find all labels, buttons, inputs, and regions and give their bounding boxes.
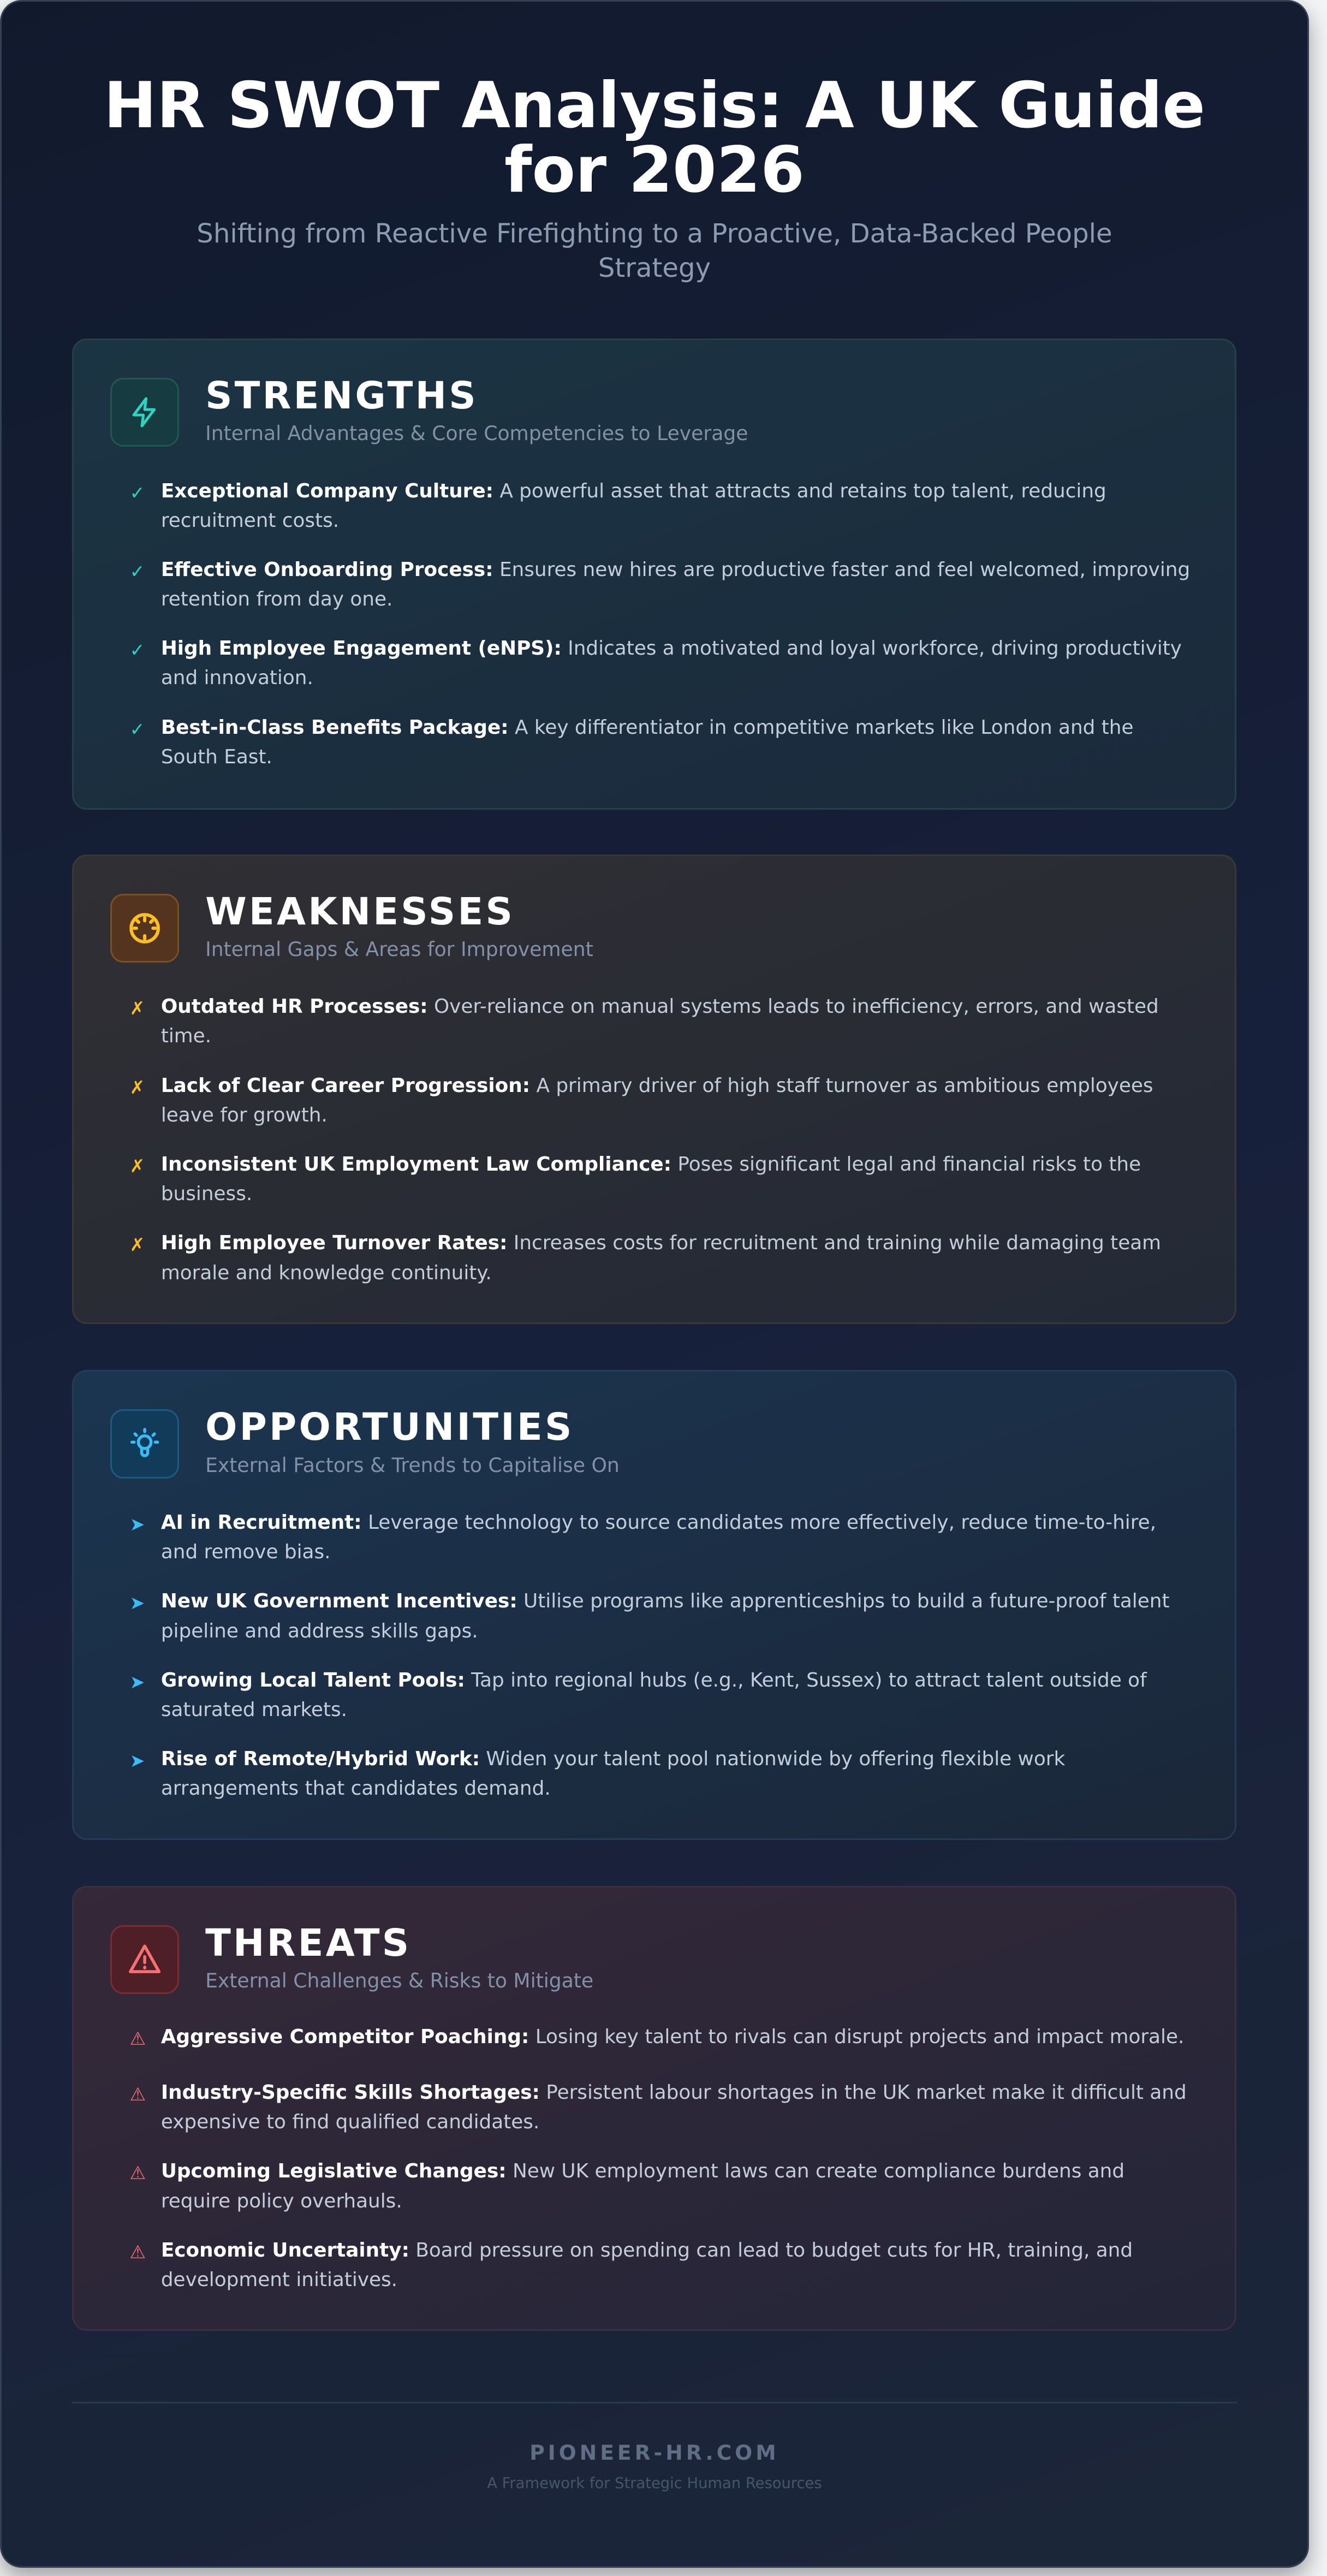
item 1: time. xyxy=(161,1025,211,1047)
item 4 xyxy=(130,2239,1133,2291)
icon: gauge xyxy=(110,894,179,963)
panel: threats: ⚠ xyxy=(130,2084,146,2105)
item 4: High Employee Turnover Rates: Increases costs for recruitment and training while damaging team xyxy=(161,1232,1161,1254)
item 4: Rise of Remote/Hybrid Work: Widen your talent pool nationwide by offering flexible work xyxy=(161,1748,1065,1770)
icon: warning xyxy=(110,1925,179,1994)
subheading: External Challenges & Risks to Mitigate xyxy=(205,1969,593,1992)
item 3: Upcoming Legislative Changes: New UK employment laws can create compliance burdens and xyxy=(161,2160,1124,2182)
panel: threats: ⚠ xyxy=(130,2162,146,2183)
item 3: saturated markets. xyxy=(161,1699,347,1721)
heading: STRENGTHS xyxy=(205,374,478,418)
subtitle: Shifting from Reactive Firefighting to a Proactive, Data-Backed People xyxy=(197,218,1112,249)
subtitle xyxy=(197,218,1112,283)
item 1 xyxy=(130,1511,1156,1563)
panel: opportunities: ➤ xyxy=(130,1750,145,1771)
item 4: development initiatives. xyxy=(161,2269,397,2291)
item 2: expensive to find qualified candidates. xyxy=(161,2111,539,2133)
item 3: business. xyxy=(161,1183,252,1205)
item 1: Aggressive Competitor Poaching: Losing key talent to rivals can disrupt projects and impact morale. xyxy=(161,2026,1184,2048)
item 3: and innovation. xyxy=(161,667,313,689)
item 2 xyxy=(130,1590,1169,1642)
heading: THREATS xyxy=(205,1921,411,1965)
item 4 xyxy=(130,716,1133,768)
panel: opportunities: ➤ xyxy=(130,1592,145,1613)
panel: weaknesses xyxy=(72,854,1236,1324)
item 3: High Employee Engagement (eNPS): Indicates a motivated and loyal workforce, driving productivity xyxy=(161,637,1182,660)
panel: strengths: ✓ xyxy=(130,482,145,503)
footer brand: PIONEER-HR.COM xyxy=(529,2441,779,2465)
item 4: South East. xyxy=(161,746,272,768)
footer tagline: A Framework for Strategic Human Resources xyxy=(487,2475,822,2492)
item 3: Inconsistent UK Employment Law Compliance: Poses significant legal and financial risks to the xyxy=(161,1153,1141,1176)
item 3 xyxy=(130,2160,1124,2212)
subheading: External Factors & Trends to Capitalise On xyxy=(205,1453,620,1477)
item 2: Industry-Specific Skills Shortages: Persistent labour shortages in the UK market make it difficult and xyxy=(161,2081,1187,2104)
panel: strengths: ✓ xyxy=(130,639,145,661)
item 2 xyxy=(130,2081,1187,2133)
panel: weaknesses: ✗ xyxy=(130,1234,145,1255)
item 2: pipeline and address skills gaps. xyxy=(161,1619,478,1642)
item 1: and remove bias. xyxy=(161,1541,331,1563)
icon: lightbulb xyxy=(110,1409,179,1479)
item 4 xyxy=(130,1748,1065,1800)
heading: WEAKNESSES xyxy=(205,890,515,934)
item 4: morale and knowledge continuity. xyxy=(161,1262,492,1284)
panel: strengths xyxy=(72,339,1236,810)
panel: threats: ⚠ xyxy=(130,2028,146,2049)
item 2: retention from day one. xyxy=(161,588,392,610)
panel: strengths: ✓ xyxy=(130,719,145,740)
item 2 xyxy=(130,1075,1153,1126)
title: HR SWOT Analysis: A UK Guide xyxy=(104,69,1205,143)
heading: OPPORTUNITIES xyxy=(205,1405,574,1449)
item 1 xyxy=(130,995,1159,1047)
item 3 xyxy=(130,1153,1141,1205)
panel: weaknesses: ✗ xyxy=(130,998,145,1019)
panel: weaknesses: ✗ xyxy=(130,1155,145,1177)
item 1: AI in Recruitment: Leverage technology to source candidates more effectively, reduce time-to-hire, xyxy=(161,1511,1156,1534)
item 4: Economic Uncertainty: Board pressure on spending can lead to budget cuts for HR, training, and xyxy=(161,2239,1133,2262)
item 3 xyxy=(130,637,1182,689)
title: for 2026 xyxy=(504,133,805,207)
panel: opportunities: ➤ xyxy=(130,1513,145,1535)
panel: opportunities xyxy=(72,1370,1236,1840)
subheading: Internal Gaps & Areas for Improvement xyxy=(205,937,593,961)
panel: threats: ⚠ xyxy=(130,2241,146,2263)
item 2: New UK Government Incentives: Utilise programs like apprenticeships to build a future-proof talent xyxy=(161,1590,1169,1612)
item 3 xyxy=(130,1669,1147,1721)
item 1 xyxy=(130,479,1106,532)
title xyxy=(104,69,1205,207)
item 4: arrangements that candidates demand. xyxy=(161,1777,551,1800)
panel: threats xyxy=(72,1886,1236,2331)
item 4 xyxy=(130,1232,1161,1284)
panel: strengths: ✓ xyxy=(130,561,145,582)
item 3: require policy overhauls. xyxy=(161,2189,402,2212)
item 2: Lack of Clear Career Progression: A primary driver of high staff turnover as ambitious employees xyxy=(161,1075,1153,1097)
subheading: Internal Advantages & Core Competencies to Leverage xyxy=(205,422,748,445)
item 2: Effective Onboarding Process: Ensures new hires are productive faster and feel welcomed, improving xyxy=(161,559,1190,581)
item 1: recruitment costs. xyxy=(161,509,339,532)
item 2: leave for growth. xyxy=(161,1104,328,1126)
subtitle: Strategy xyxy=(598,253,711,283)
item 4: Best-in-Class Benefits Package: A key differentiator in competitive markets like London and the xyxy=(161,716,1133,739)
panel: opportunities: ➤ xyxy=(130,1671,145,1693)
item 1: Exceptional Company Culture: A powerful asset that attracts and retains top talent, reducing xyxy=(161,479,1106,502)
icon: lightning xyxy=(110,378,179,447)
item 3: Growing Local Talent Pools: Tap into regional hubs (e.g., Kent, Sussex) to attract talent outside of xyxy=(161,1669,1147,1691)
item 2 xyxy=(130,559,1190,610)
item 1: Outdated HR Processes: Over-reliance on manual systems leads to inefficiency, errors, and wasted xyxy=(161,995,1159,1018)
panel: weaknesses: ✗ xyxy=(130,1077,145,1098)
